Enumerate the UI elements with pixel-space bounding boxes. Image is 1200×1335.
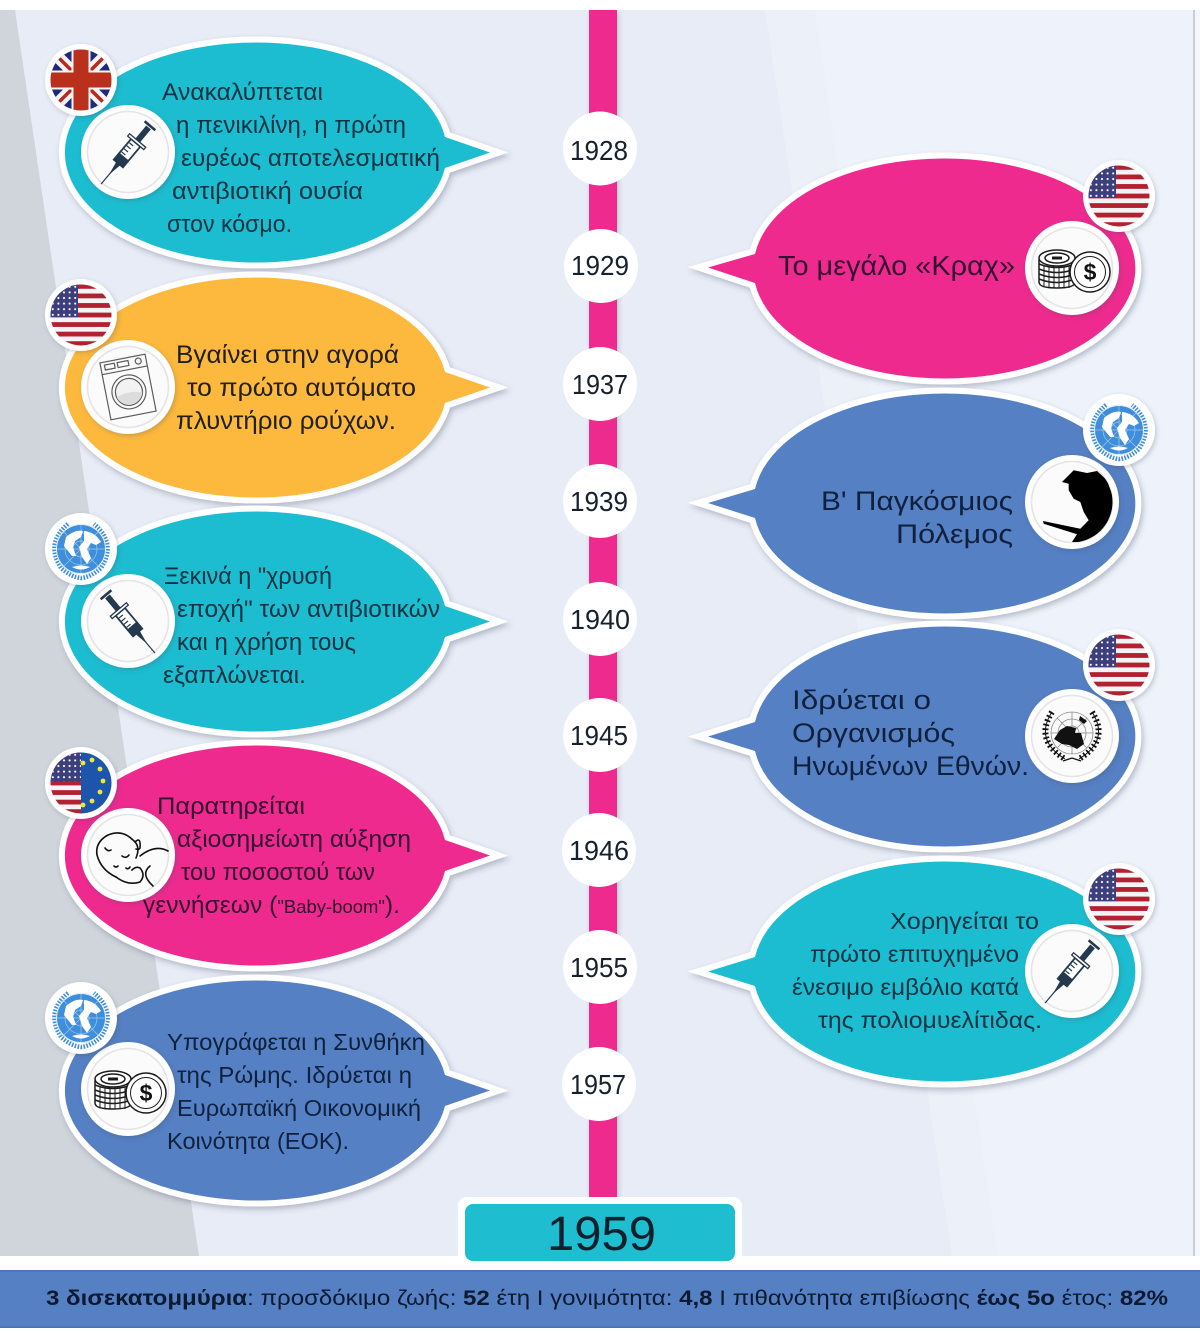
year markers — [562, 112, 638, 1121]
text: baby boom: του ποσοστού των — [181, 859, 375, 886]
text: United Nations: Ιδρύεται ο — [792, 685, 931, 715]
year 1937 — [563, 347, 637, 421]
icon: coins — [1025, 221, 1119, 315]
text: treaty of Rome: Υπογράφεται η Συνθήκη — [167, 1029, 425, 1055]
text: baby boom: αξιοσημείωτη αύξηση — [177, 826, 411, 853]
year 1957 — [562, 1047, 636, 1121]
icon: washing machine — [81, 340, 175, 434]
text: treaty of Rome: Ευρωπαϊκή Οικονομική — [177, 1095, 421, 1121]
icon: US flag — [1083, 629, 1155, 701]
icon: syringe — [81, 574, 175, 668]
text: world war II — [821, 486, 1013, 549]
panel: 1940 antibiotics — [45, 511, 490, 732]
text: penicillin: αντιβιοτική ουσία — [172, 178, 363, 205]
bubble shape — [708, 158, 1135, 378]
bubble shape — [65, 980, 490, 1200]
year 1937: 1937 — [572, 369, 628, 400]
panel: 1945 United Nations — [708, 626, 1155, 846]
text: penicillin — [162, 79, 440, 238]
bubble shape — [65, 42, 490, 262]
text: treaty of Rome: της Ρώμης. Ιδρύεται η — [177, 1062, 412, 1088]
icon: UN emblem blue — [1083, 394, 1155, 466]
icon: UN emblem blue — [45, 513, 117, 585]
panel: 1955 polio vaccine — [708, 861, 1155, 1082]
year 1955: 1955 — [570, 952, 628, 983]
text: United Nations: Οργανισμός — [792, 718, 955, 748]
text: washing machine — [176, 341, 416, 435]
text: antibiotics: Ξεκινά η "χρυσή — [164, 563, 332, 590]
text: antibiotics: εξαπλώνεται. — [163, 662, 306, 689]
text: antibiotics: και η χρήση τους — [177, 629, 356, 656]
text: polio vaccine: Χορηγείται το — [890, 908, 1039, 934]
bubble shape — [708, 626, 1135, 846]
text: penicillin: στον κόσμο. — [167, 211, 292, 238]
panel: 1928 penicillin — [45, 42, 490, 262]
summary bar — [0, 1270, 1200, 1328]
year 1945 — [563, 698, 637, 772]
timeline bar — [589, 10, 617, 1202]
icon: US flag — [1083, 160, 1155, 232]
panel: 1937 washing machine — [45, 277, 490, 497]
panel: 1946 baby boom — [45, 745, 490, 965]
strip below background — [0, 1256, 1200, 1271]
icon: sleeping baby — [81, 808, 175, 902]
icon: US flag — [1083, 863, 1155, 935]
text: baby boom: γεννήσεων ("Baby-boom"). — [143, 892, 400, 919]
end year box 1959 — [458, 1197, 742, 1265]
text: washing machine: το πρώτο αυτόματο — [187, 374, 416, 402]
text: world war II: Β' Παγκόσμιος — [821, 486, 1013, 516]
icon: soldier — [1025, 455, 1119, 549]
year 1946: 1946 — [569, 835, 629, 866]
icon: US and EU flag — [45, 747, 117, 819]
icon: UN emblem black — [1025, 689, 1119, 783]
year 1929: 1929 — [571, 250, 629, 281]
text: polio vaccine — [792, 908, 1042, 1033]
panel: 1957 treaty of Rome — [45, 980, 490, 1200]
text: washing machine: Βγαίνει στην αγορά — [176, 341, 399, 369]
icon: syringe — [81, 105, 175, 199]
text: world war II: Πόλεμος — [896, 519, 1013, 549]
bubble shape — [65, 745, 490, 965]
text: antibiotics: εποχή" των αντιβιοτικών — [177, 596, 440, 623]
text: baby boom — [143, 793, 411, 919]
year 1940 — [563, 582, 637, 656]
year 1940: 1940 — [570, 604, 630, 635]
year 1929 — [564, 229, 638, 303]
icon: coins — [81, 1042, 175, 1136]
text: washing machine: πλυντήριο ρούχων. — [176, 407, 396, 435]
panel: 1939 world war II — [708, 393, 1155, 614]
text: United Nations — [792, 685, 1029, 781]
text: treaty of Rome: Κοινότητα (ΕΟΚ). — [167, 1128, 349, 1154]
bubble shape — [708, 861, 1135, 1082]
text: polio vaccine: πρώτο επιτυχημένο — [810, 941, 1019, 967]
icon: UN emblem blue — [45, 982, 117, 1054]
year 1928 — [563, 112, 637, 186]
text: United Nations: Ηνωμένων Εθνών. — [792, 751, 1029, 781]
end year box 1959: 1959 — [547, 1208, 656, 1261]
year 1945: 1945 — [570, 720, 628, 751]
year 1955 — [563, 930, 637, 1004]
icon: syringe — [1025, 924, 1119, 1018]
bubble shape — [65, 277, 490, 497]
text: penicillin: ευρέως αποτελεσματική — [181, 145, 440, 172]
year 1946 — [562, 813, 636, 887]
text: baby boom: Παρατηρείται — [157, 793, 305, 820]
text: antibiotics — [163, 563, 440, 689]
year 1957: 1957 — [570, 1069, 626, 1100]
bubble shape — [708, 393, 1135, 614]
year 1939 — [563, 464, 637, 538]
year 1939: 1939 — [570, 486, 628, 517]
panel: 1929 crash — [708, 158, 1155, 378]
text: crash: Το μεγάλο «Κραχ» — [778, 250, 1015, 281]
icon: UK flag — [45, 44, 117, 116]
summary bar: 3 δισεκατομμύρια : προσδόκιμο ζωής: 52 έτη Ι γονιμότητα: 4,8 Ι πιθανότητα επιβίωσης έως 5ο έτος: 82% — [46, 1287, 1168, 1310]
text: penicillin: η πενικιλίνη, η πρώτη — [176, 112, 406, 139]
text: treaty of Rome — [167, 1029, 425, 1154]
icon: US flag — [45, 279, 117, 351]
text: polio vaccine: ένεσιμο εμβόλιο κατά — [792, 974, 1019, 1000]
year 1928: 1928 — [570, 135, 628, 166]
text: polio vaccine: της πολιομυελίτιδας. — [818, 1007, 1042, 1033]
bubble shape — [65, 511, 490, 732]
text: penicillin: Ανακαλύπτεται — [162, 79, 323, 106]
